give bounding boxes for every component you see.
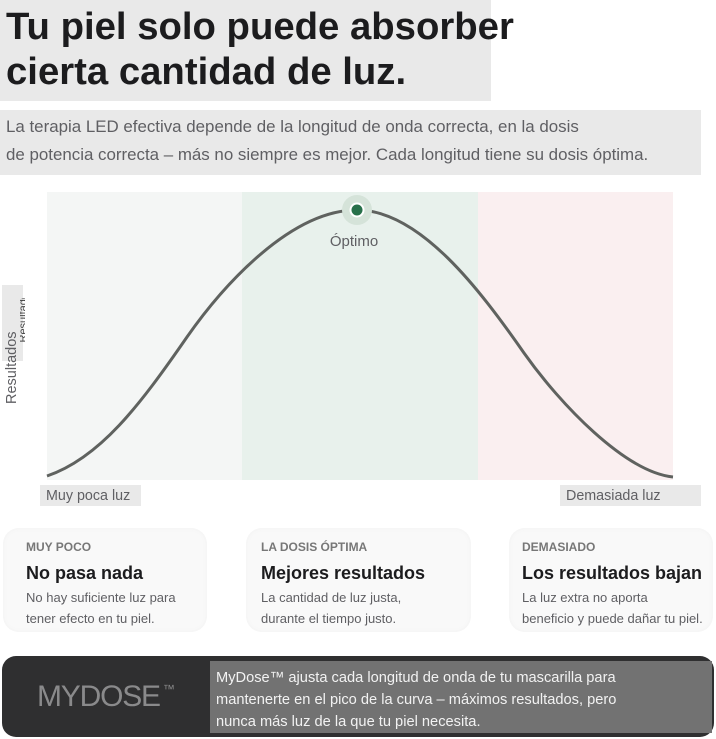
- mydose description: [210, 661, 712, 733]
- x axis label: too little: [40, 485, 141, 506]
- x axis label: too little: Muy poca luz: [46, 488, 130, 504]
- zone: optimal dose: [242, 192, 478, 480]
- card text: beneficio y puede dañar tu piel.: [522, 610, 703, 626]
- card text: durante el tiempo justo.: [261, 610, 396, 626]
- bell curve chart: [46, 192, 674, 480]
- x axis label: too much: [560, 485, 701, 506]
- card text: [261, 590, 401, 626]
- subtitle: [0, 110, 701, 175]
- subtitle: La terapia LED efectiva depende de la longitud de onda correcta, en la dosis: [6, 117, 579, 136]
- card label: LA DOSIS ÓPTIMA: [261, 540, 367, 554]
- card label: DEMASIADO: [522, 540, 595, 554]
- dose response curve: [47, 210, 673, 477]
- title: [0, 0, 491, 101]
- title: cierta cantidad de luz.: [6, 50, 406, 92]
- mydose description: nunca más luz de la que tu piel necesita.: [216, 714, 481, 730]
- card label: MUY POCO: [26, 540, 91, 554]
- card heading: Mejores resultados: [261, 563, 425, 583]
- title: Tu piel solo puede absorber: [6, 5, 514, 48]
- mydose logo: MYDOSE™: [37, 680, 175, 713]
- card text: La cantidad de luz justa,: [261, 590, 401, 605]
- card heading: No pasa nada: [26, 563, 143, 583]
- card: too much: [509, 528, 713, 632]
- card text: [26, 590, 176, 626]
- optimal label: Óptimo: [330, 233, 378, 250]
- optimal point marker: [342, 195, 372, 225]
- x axis label: too much: Demasiada luz: [566, 488, 661, 504]
- card: too little: [3, 528, 207, 632]
- zone: too little light: [47, 192, 242, 480]
- subtitle: de potencia correcta – más no siempre es mejor. Cada longitud tiene su dosis óptima.: [6, 145, 648, 164]
- card text: tener efecto en tu piel.: [26, 610, 155, 626]
- mydose description: MyDose™ ajusta cada longitud de onda de tu mascarilla para: [216, 670, 616, 686]
- y axis label: [2, 285, 25, 404]
- y axis label: Resultados: [4, 331, 20, 404]
- card heading: Los resultados bajan: [522, 563, 702, 583]
- card text: No hay suficiente luz para: [26, 590, 176, 605]
- card text: [522, 590, 703, 626]
- zone: too much light: [478, 192, 673, 480]
- card: optimal dose: [246, 528, 471, 632]
- card text: La luz extra no aporta: [522, 590, 648, 605]
- mydose banner: [2, 656, 714, 737]
- mydose description: mantenerte en el pico de la curva – máximos resultados, pero: [216, 692, 616, 708]
